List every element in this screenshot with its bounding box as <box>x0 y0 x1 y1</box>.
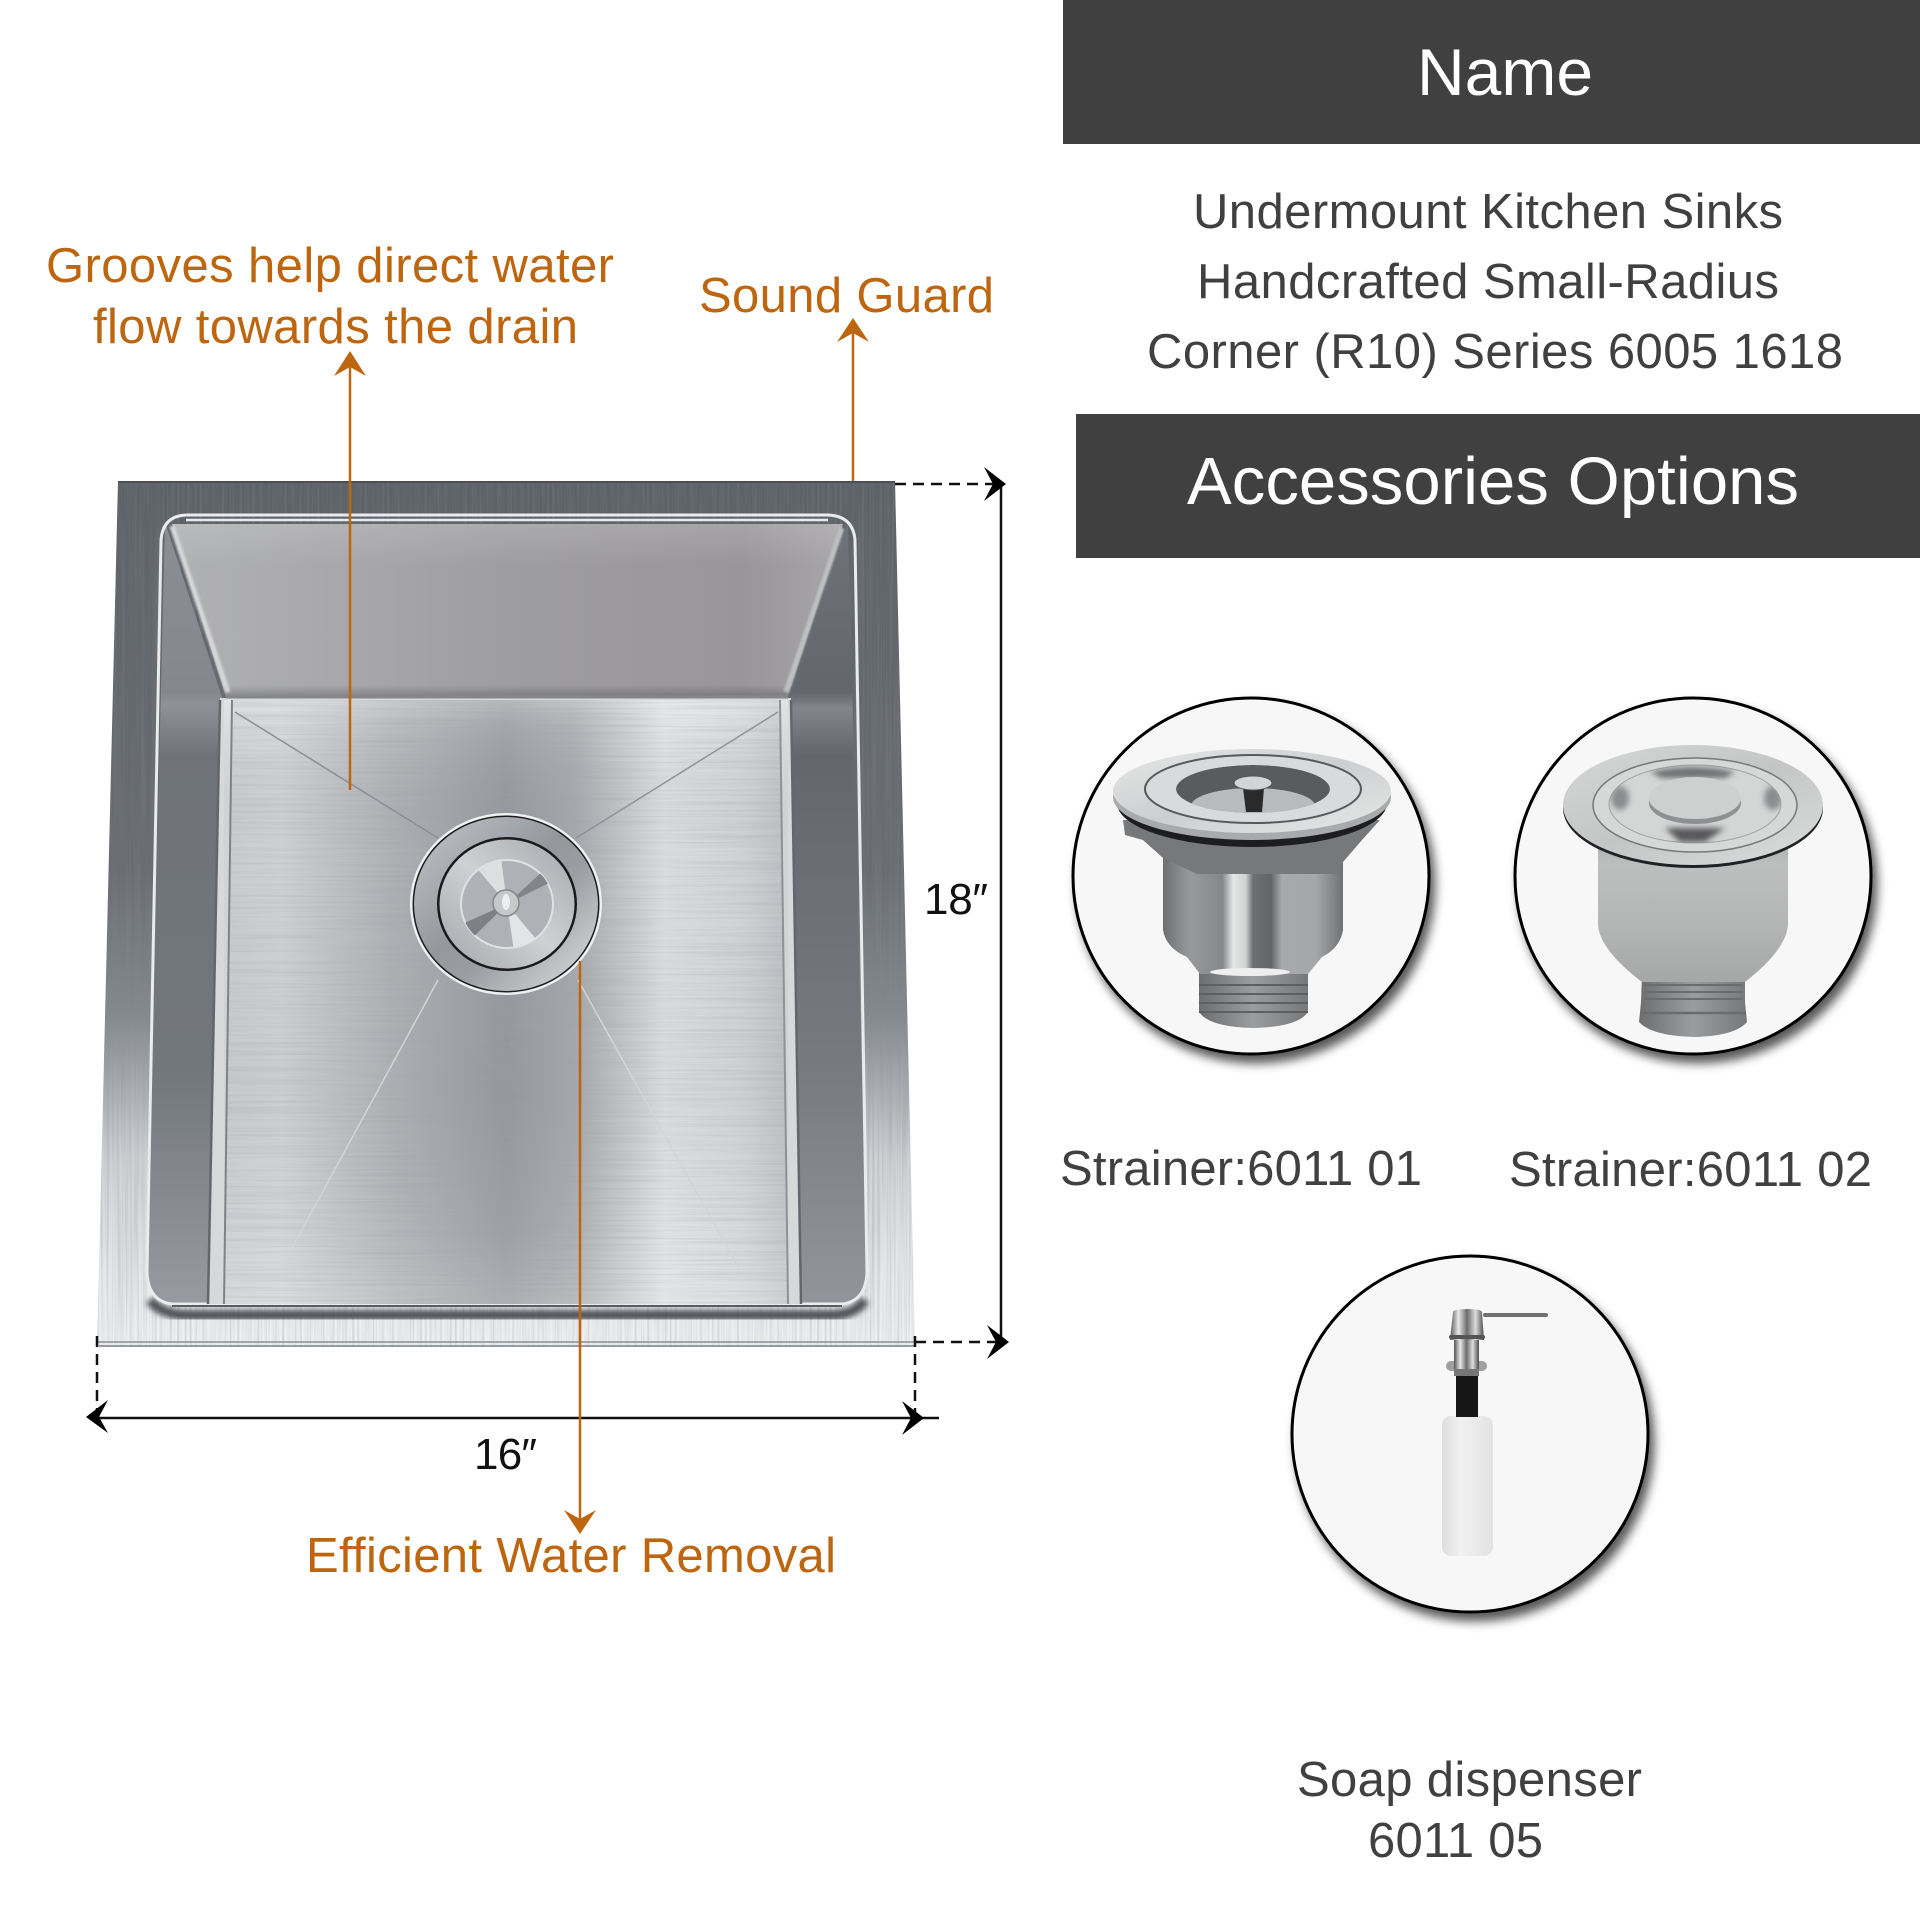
callout: efficient water removal: Efficient Water Removal <box>306 1529 836 1583</box>
callout: efficient water removal <box>306 961 836 1583</box>
bowl rim highlights <box>147 515 867 1306</box>
accessory captions: Soap dispenser <box>1297 1753 1642 1807</box>
product name text block: Undermount Kitchen Sinks <box>1193 185 1783 239</box>
header: Accessories Options: Accessories Options <box>1187 444 1799 519</box>
bowl back wall <box>172 524 843 697</box>
accessory captions: Strainer:6011 02 <box>1509 1143 1872 1197</box>
thread and nut <box>1639 975 1747 1037</box>
spout <box>1483 1313 1548 1317</box>
sink flange <box>97 481 915 1347</box>
dimension: 16 inch width <box>86 1336 939 1479</box>
groove lines <box>235 712 778 1270</box>
header: Name: Name <box>1417 35 1593 109</box>
callout: grooves: Grooves help direct water <box>46 239 614 293</box>
pump head <box>1450 1309 1484 1340</box>
bowl floor <box>208 697 801 1304</box>
black tube <box>1456 1375 1478 1417</box>
bowl side walls <box>147 522 867 1303</box>
accessory captions: 6011 05 <box>1368 1814 1543 1868</box>
plastic collar <box>1123 820 1380 874</box>
accessory captions <box>1060 1142 1872 1868</box>
dimension: 18 inch height: 18″ <box>924 875 988 924</box>
accessory: strainer 6011 01 <box>1073 698 1429 1054</box>
product name text block: Handcrafted Small-Radius <box>1197 255 1779 309</box>
callout: grooves: flow towards the drain <box>93 300 578 354</box>
callout: grooves <box>46 239 614 790</box>
callout: sound guard <box>699 269 994 481</box>
flange <box>1563 748 1823 868</box>
header: Accessories Options <box>1076 414 1920 558</box>
product name text block: Corner (R10) Series 6005 1618 <box>1147 325 1843 379</box>
soft shadow under bowl rim <box>150 1300 865 1315</box>
strainer body <box>1163 855 1343 974</box>
bottle <box>1442 1416 1493 1556</box>
accessory captions: Strainer:6011 01 <box>1060 1142 1422 1196</box>
sink photo <box>97 481 915 1347</box>
header: Name <box>1063 0 1920 144</box>
dimension: 16 inch width: 16″ <box>474 1430 537 1479</box>
accessory: soap dispenser 6011 05 <box>1292 1256 1648 1612</box>
thread <box>1199 968 1308 1028</box>
product name text block <box>1147 185 1843 379</box>
flange <box>1117 759 1387 847</box>
collar <box>1446 1361 1487 1371</box>
drain <box>410 813 602 995</box>
accessory: strainer 6011 02 <box>1515 698 1871 1054</box>
dimension: 18 inch height <box>895 467 1009 1359</box>
callout: sound guard: Sound Guard <box>699 269 994 323</box>
body <box>1598 835 1788 982</box>
